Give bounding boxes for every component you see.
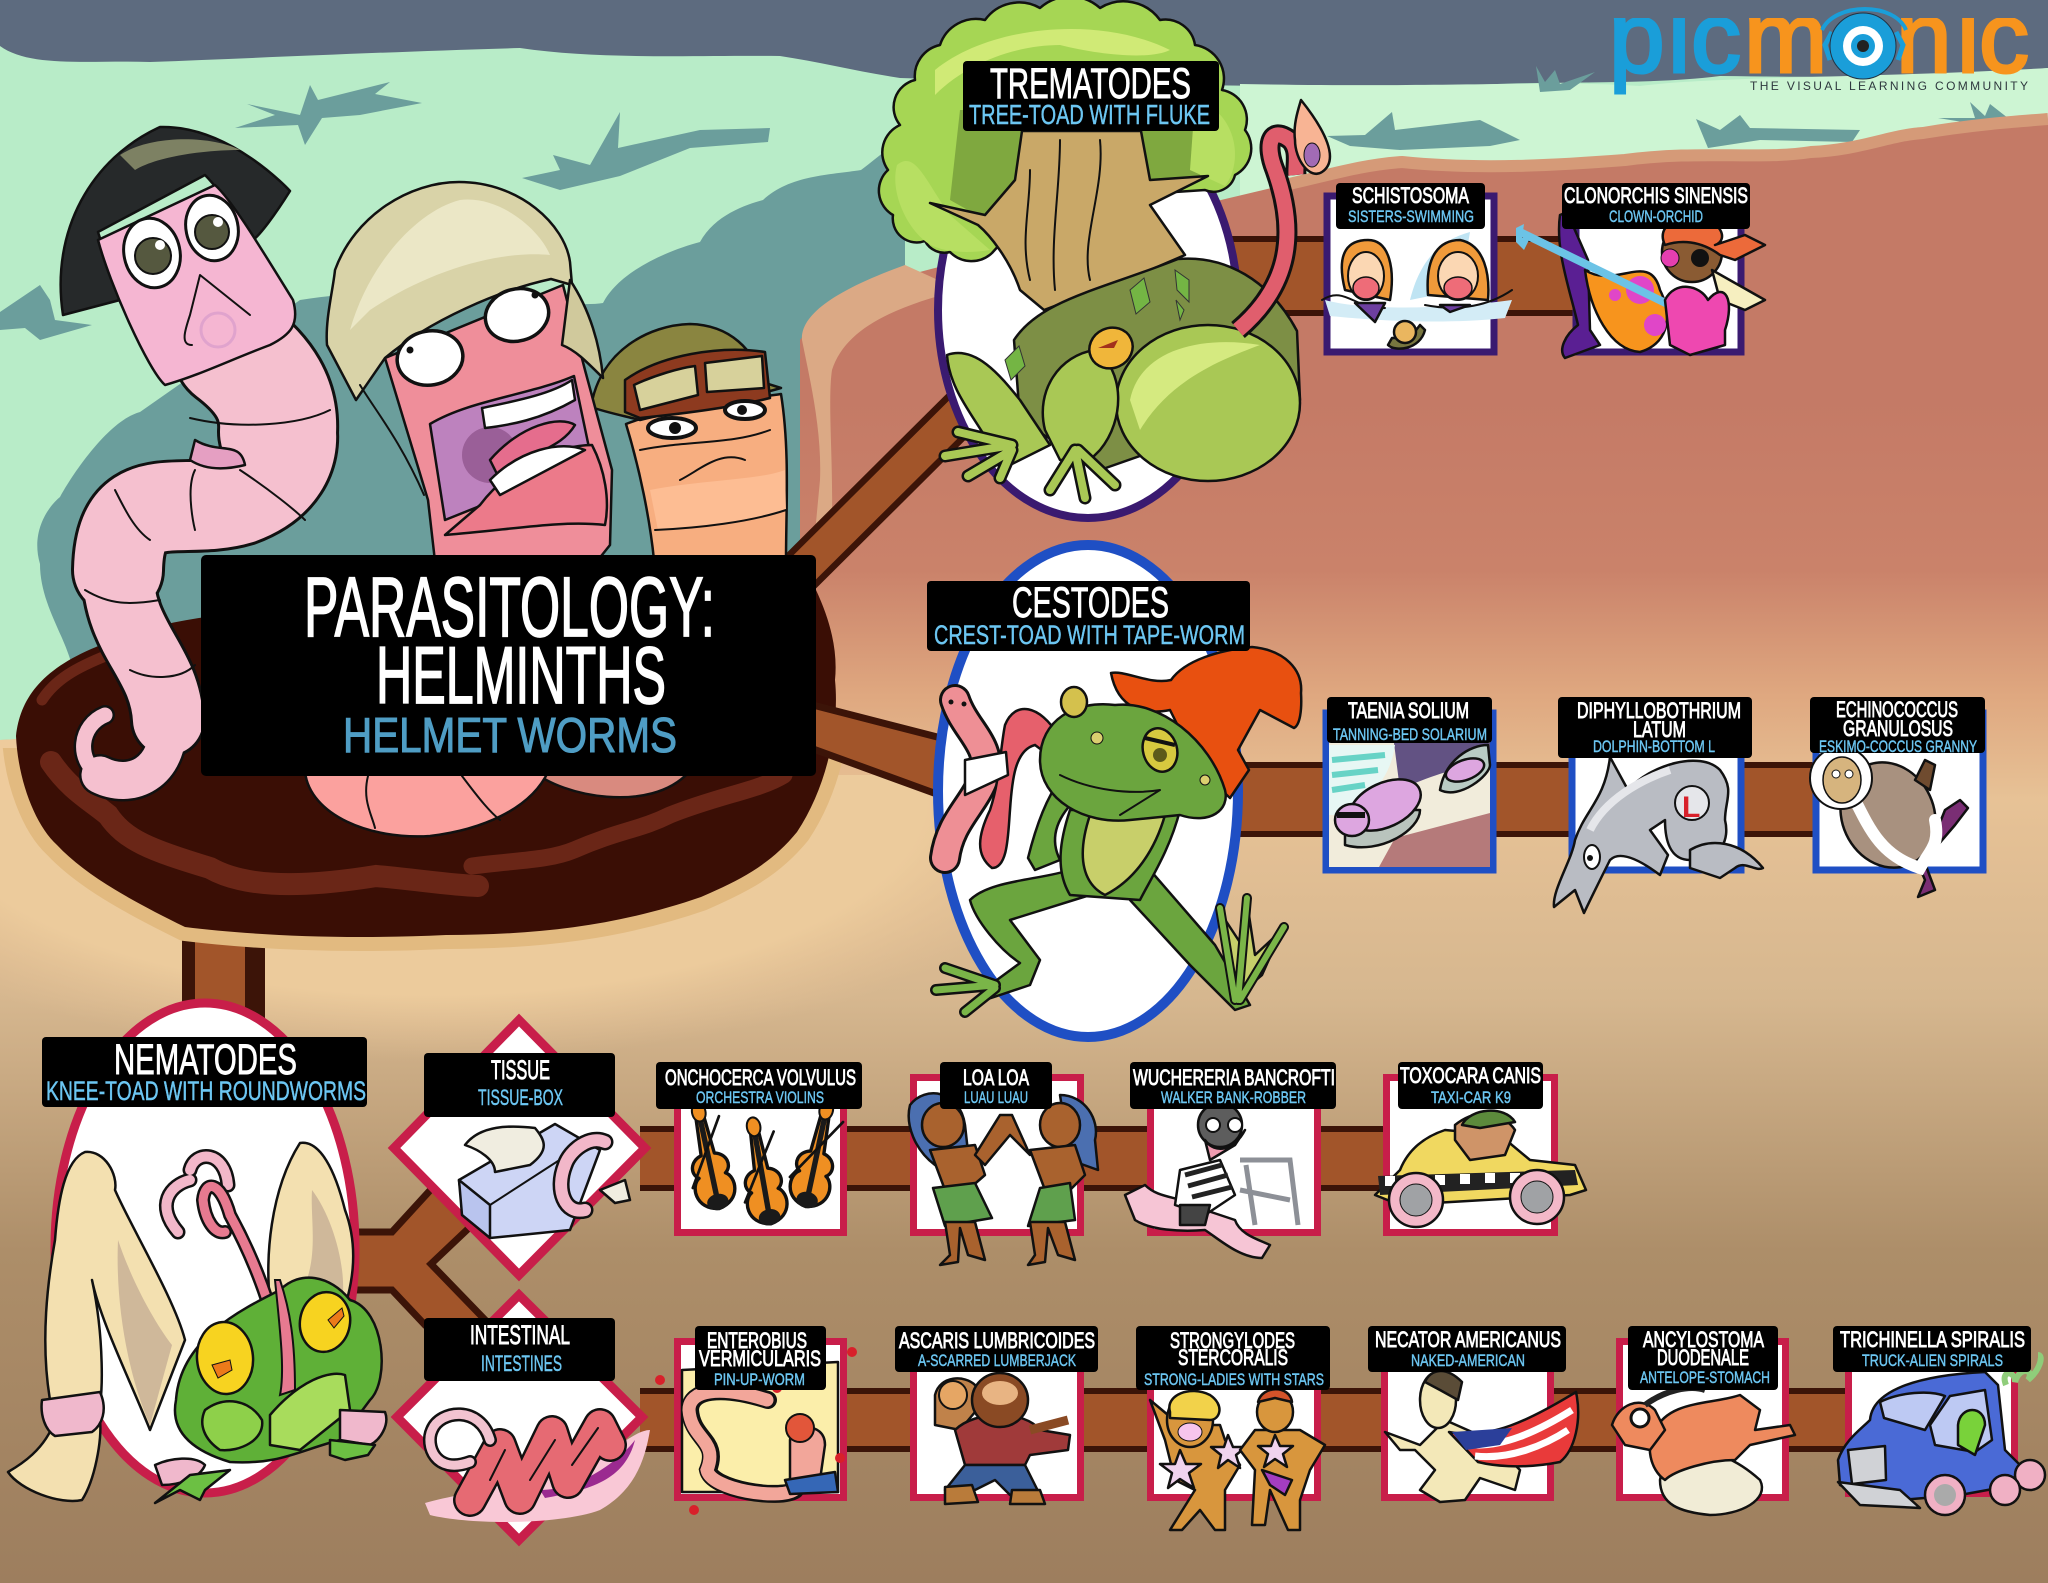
branch: cestodes: [1235, 762, 1820, 837]
frame: [1384, 1342, 1550, 1498]
card: wuchereria bancrofti: [1125, 1062, 1336, 1258]
label: TRUCK-ALIEN SPIRALS: [1862, 1351, 2003, 1370]
label: WALKER BANK-ROBBER: [1161, 1088, 1306, 1107]
card: necator americanus: [1368, 1326, 1578, 1502]
label: [695, 1326, 826, 1390]
card: schistosoma: [1322, 183, 1512, 352]
toad foot lower: [1050, 450, 1115, 498]
label: ORCHESTRA VIOLINS: [696, 1088, 824, 1107]
heading label: [927, 579, 1250, 651]
label: [1368, 1326, 1566, 1372]
label: GRANULOSUS: [1843, 716, 1953, 741]
title line 1: PARASITOLOGY:: [304, 560, 715, 654]
frame: [914, 1342, 1080, 1498]
worm: orange with goggles: [591, 324, 787, 560]
oval: [938, 102, 1238, 518]
frame: [678, 1342, 844, 1498]
tongue: [1238, 135, 1296, 330]
icon: violins: [676, 1096, 848, 1229]
fluke: [1295, 100, 1330, 174]
card: strongylodes stercoralis: [1136, 1326, 1330, 1530]
label: TAENIA SOLIUM: [1348, 698, 1469, 723]
label: [424, 1053, 615, 1117]
label: [1130, 1062, 1336, 1109]
heading label: CREST-TOAD WITH TAPE-WORM: [934, 620, 1245, 650]
sock: [42, 1392, 104, 1436]
frame: [1326, 713, 1493, 870]
frame: [1150, 1078, 1318, 1232]
label: NECATOR AMERICANUS: [1375, 1327, 1561, 1352]
toad right leg: [1130, 870, 1250, 1010]
card: ancylostoma duodenale: [1612, 1326, 1795, 1515]
label: STERCORALIS: [1178, 1345, 1288, 1370]
label: DUODENALE: [1657, 1345, 1749, 1370]
label: INTESTINAL: [470, 1320, 570, 1350]
tagline: THE VISUAL LEARNING COMMUNITY: [1750, 79, 2028, 93]
icon: truck alien spirals: [1838, 1355, 2045, 1515]
label: [1136, 1326, 1330, 1390]
crest: [1111, 647, 1301, 798]
frame: [1816, 713, 1983, 870]
frame: [1848, 1342, 2014, 1494]
label: [1810, 697, 1985, 756]
panel: intestinal: [397, 1295, 650, 1540]
icon: taxi car k9: [1375, 1111, 1586, 1227]
worm: lower coils: [305, 772, 689, 836]
heading label: TREMATODES: [990, 60, 1191, 108]
label: STRONGYLODES: [1170, 1328, 1295, 1353]
icon: tissue box: [459, 1124, 630, 1238]
card: loa loa: [909, 1062, 1098, 1265]
label: DOLPHIN-BOTTOM L: [1593, 737, 1715, 756]
card: diphyllobothrium latum: [1554, 697, 1763, 913]
label: LUAU LUAU: [964, 1088, 1028, 1107]
label: NAKED-AMERICAN: [1411, 1351, 1525, 1370]
tape worm: [945, 700, 1058, 868]
tree crown: [879, 0, 1251, 261]
panel: trematodes: [879, 0, 1330, 518]
label: [1327, 697, 1492, 744]
branch: tissue nematodes: [640, 1126, 1385, 1191]
worm: pink dark helmet: [61, 127, 330, 780]
icon: naked american: [1385, 1371, 1578, 1502]
icon: intestines: [425, 1414, 650, 1522]
toad head: [1040, 704, 1226, 821]
oval: [938, 545, 1238, 1037]
label: ECHINOCOCCUS: [1836, 697, 1958, 722]
label: [1562, 183, 1750, 229]
card: enterobius vermicularis: [655, 1326, 857, 1515]
toad right foot: [1220, 898, 1284, 1000]
frame: [1620, 1342, 1786, 1498]
toad eye: [1083, 321, 1139, 375]
label: [940, 1062, 1052, 1109]
label: ANTELOPE-STOMACH: [1640, 1368, 1770, 1387]
illustration: helmet worms: [61, 127, 787, 836]
label: WUCHERERIA BANCROFTI: [1133, 1065, 1335, 1090]
label: LOA LOA: [963, 1065, 1029, 1090]
label: TAXI-CAR K9: [1431, 1088, 1511, 1107]
teal hillside: [37, 140, 905, 710]
right leg: [268, 1143, 353, 1320]
label: [1628, 1326, 1778, 1390]
toad head: [175, 1278, 382, 1462]
label: TANNING-BED SOLARIUM: [1333, 725, 1487, 744]
label: A-SCARRED LUMBERJACK: [918, 1351, 1076, 1370]
icon: pin up worm: [655, 1347, 857, 1515]
oval: [55, 1003, 355, 1493]
heading label: CESTODES: [1012, 579, 1169, 627]
branch: trematodes: [1230, 236, 1590, 316]
label: STRONG-LADIES WITH STARS: [1144, 1370, 1324, 1389]
label: LATUM: [1633, 717, 1686, 742]
toad left leg: [970, 870, 1090, 1000]
label: ONCHOCERCA VOLVULUS: [665, 1065, 856, 1090]
frame: [914, 1078, 1080, 1232]
icon: eskimo granny: [1810, 747, 1968, 897]
heading label: NEMATODES: [114, 1036, 297, 1084]
label: TISSUE-BOX: [478, 1085, 563, 1110]
card: toxocara canis: [1375, 1062, 1586, 1232]
icon: hula dancers: [909, 1093, 1098, 1265]
label: [1833, 1326, 2031, 1372]
label: [1558, 697, 1752, 758]
icon: tanning bed: [1329, 716, 1490, 867]
card: echinococcus granulosus: [1810, 697, 1985, 897]
connector: nematodes fork: [350, 1185, 490, 1325]
left leg: [45, 1152, 185, 1430]
label: [1336, 183, 1485, 229]
label: SISTERS-SWIMMING: [1348, 207, 1474, 226]
card: onchocerca volvulus: [656, 1062, 862, 1232]
card: clonorchis sinensis: [1516, 183, 1765, 358]
icon: scarred lumberjack: [935, 1373, 1070, 1504]
icon: strong ladies with stars: [1150, 1389, 1325, 1530]
label: ANCYLOSTOMA: [1643, 1327, 1764, 1352]
icon: walker bank robber: [1125, 1103, 1298, 1258]
frame: [1327, 196, 1494, 352]
shrubs: [0, 66, 2013, 340]
label: ASCARIS LUMBRICOIDES: [899, 1328, 1095, 1353]
frame: [1386, 1078, 1554, 1232]
worm: [166, 1156, 228, 1232]
foot: [8, 1420, 100, 1501]
green hills: [0, 46, 2048, 900]
card: trichinella spiralis: [1833, 1326, 2045, 1515]
icon: crest toad with tape worm: [936, 647, 1301, 1012]
subtitle: HELMET WORMS: [343, 709, 677, 763]
icon: antelope stomach: [1612, 1388, 1795, 1515]
diamond: [397, 1295, 642, 1540]
nest: [16, 590, 836, 937]
heading label: [42, 1036, 367, 1107]
logo: picmonic: [1609, 0, 2029, 94]
label: [1398, 1062, 1543, 1109]
socks and feet: [340, 1410, 386, 1445]
panel: cestodes: [927, 545, 1301, 1037]
label: PIN-UP-WORM: [714, 1370, 805, 1389]
toad body: [1014, 259, 1300, 470]
label: [895, 1326, 1098, 1372]
heading label: [963, 60, 1219, 131]
icon: sisters swimming: [1322, 232, 1512, 349]
label: DIPHYLLOBOTHRIUM: [1577, 698, 1741, 723]
worm: screaming beige helmet: [327, 182, 612, 570]
icon: dolphin: [1554, 757, 1763, 913]
icon: knee toad with roundworms: [8, 1143, 386, 1503]
panel: nematodes: [8, 1003, 386, 1503]
frame: [1572, 713, 1741, 870]
tongue: [203, 1186, 285, 1380]
toad arm: [1043, 350, 1118, 460]
icon: snail: [1388, 321, 1425, 349]
label: TISSUE: [491, 1055, 550, 1085]
branch: intestinal nematodes: [640, 1388, 1850, 1452]
letter l: L: [1682, 791, 1700, 824]
frame: [678, 1078, 844, 1232]
toad belly: [1116, 325, 1300, 481]
label: CLOWN-ORCHID: [1609, 207, 1703, 226]
connector: title to cestodes: [805, 703, 945, 797]
tree trunk: [930, 131, 1208, 310]
title block: [201, 555, 816, 776]
toad left leg: [947, 353, 1050, 470]
toad left foot: [936, 968, 995, 1012]
connector: nest to nematodes: [182, 915, 265, 1020]
frame: [1150, 1342, 1318, 1498]
frame: [1576, 196, 1741, 352]
label: VERMICULARIS: [699, 1346, 821, 1371]
connector: title to trematodes: [800, 388, 985, 572]
label: ENTEROBIUS: [707, 1328, 807, 1353]
label: [656, 1062, 862, 1109]
panel: tissue: [394, 1020, 645, 1275]
toad torso: [1061, 810, 1180, 900]
label: CLONORCHIS SINENSIS: [1564, 183, 1748, 208]
label: TOXOCARA CANIS: [1400, 1063, 1541, 1088]
title line 2: HELMINTHS: [376, 631, 666, 721]
icon: eye with headphones: [1822, 9, 1906, 79]
label: INTESTINES: [481, 1351, 562, 1376]
card: taenia solium: [1326, 697, 1493, 870]
heading label: KNEE-TOAD WITH ROUNDWORMS: [46, 1076, 366, 1106]
icon: tree toad: [879, 0, 1330, 498]
label: ESKIMO-COCCUS GRANNY: [1819, 737, 1977, 756]
diamond: [394, 1020, 645, 1275]
label: [424, 1318, 615, 1381]
label: SCHISTOSOMA: [1352, 183, 1469, 208]
icon: clown orchid: [1516, 212, 1765, 358]
heading label: TREE-TOAD WITH FLUKE: [969, 99, 1210, 130]
card: ascaris lumbricoides: [895, 1326, 1098, 1504]
toad foot left: [945, 432, 1012, 478]
